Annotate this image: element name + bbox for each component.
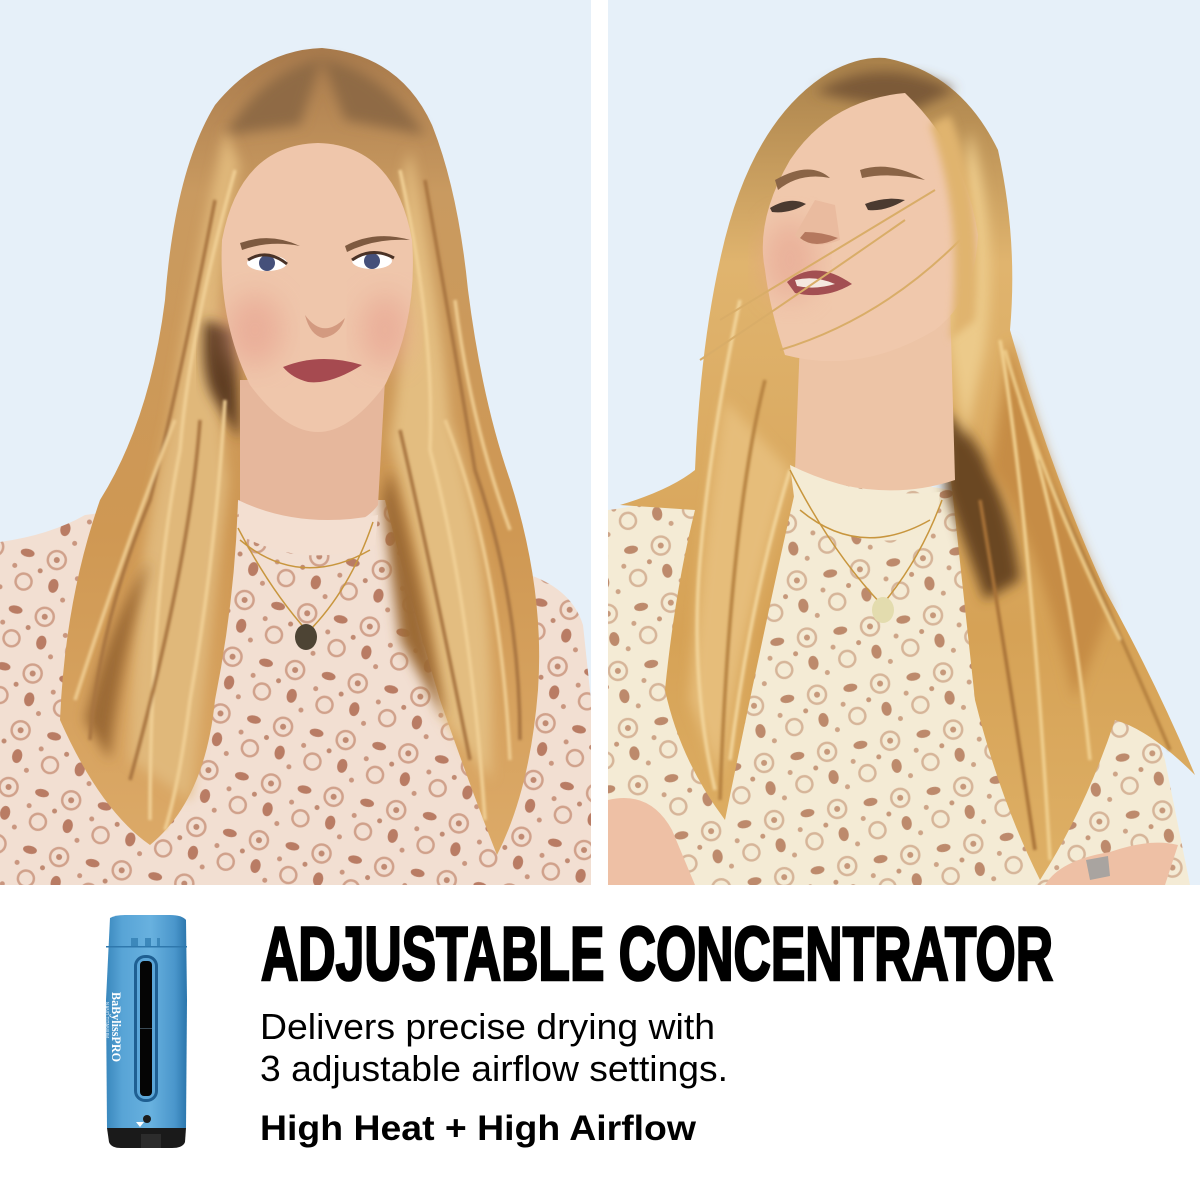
- neck: left model: [240, 380, 385, 530]
- face: left model: [222, 143, 413, 432]
- text block: description: Delivers precise drying with: [260, 1006, 715, 1047]
- icon: adjustable concentrator product: [103, 915, 187, 1148]
- panel: left photo, model with smooth hair: [0, 0, 591, 885]
- hair strands: left model: [75, 170, 520, 830]
- text block: description: 3 adjustable airflow settings.: [260, 1048, 728, 1089]
- face: right model, tilted: [700, 93, 978, 361]
- lace collar: right: [790, 465, 940, 541]
- blouse: right lace top: [608, 462, 1190, 885]
- necklace: left model: [238, 522, 373, 650]
- hair strands: right model: [697, 300, 1170, 860]
- necklace: right model: [790, 470, 942, 623]
- neck: right model: [795, 300, 955, 490]
- hair: left model: [60, 48, 539, 855]
- text block: high heat and high airflow: High Heat + High Airflow: [260, 1109, 697, 1148]
- blouse: left lace top: [0, 495, 591, 885]
- lace collar: left: [238, 500, 378, 555]
- panel: right photo, model with wind-blown hair: [608, 0, 1200, 885]
- text block: description: [260, 1006, 728, 1089]
- crossed arms: right model: [608, 798, 1178, 885]
- product logo text: BaBylissPRO: [109, 992, 124, 1062]
- hair: right model: [620, 58, 1195, 880]
- product sub-logo text: NANO TITANIUM: [103, 1002, 109, 1038]
